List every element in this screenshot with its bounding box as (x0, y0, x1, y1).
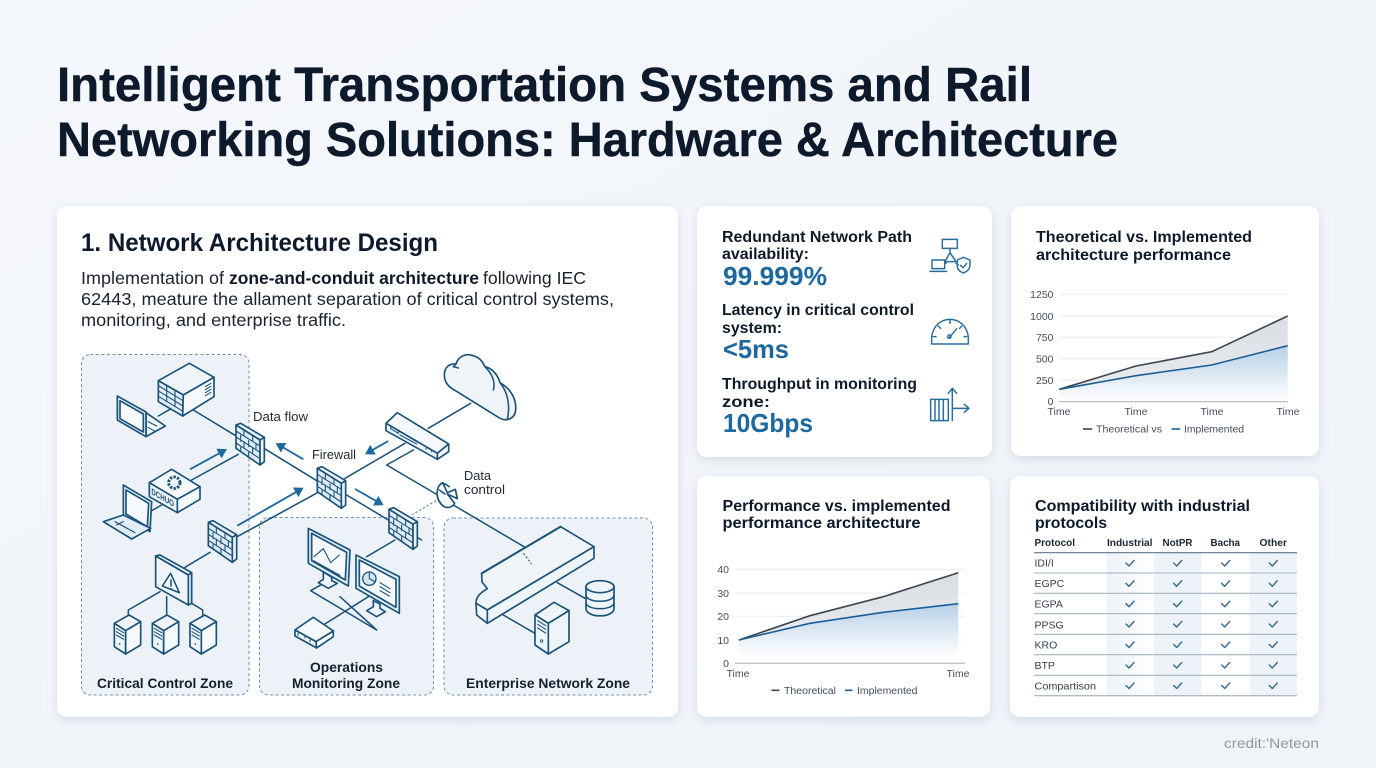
icon: enterprise server (535, 602, 569, 654)
hub label: DCHUO (151, 486, 174, 509)
network diagram: right part (340, 355, 614, 654)
area line chart: 1000 (1030, 311, 1054, 323)
label: data control: control (464, 483, 505, 497)
chart legend: Theoretical (784, 685, 836, 697)
area line chart (717, 564, 970, 680)
dashed link (412, 500, 437, 515)
label: critical control zone: Critical Control Zone (97, 675, 233, 691)
area line chart: 30 (717, 588, 729, 600)
area line chart: Time (1048, 406, 1071, 418)
intro paragraph: monitoring, and enterprise traffic. (81, 310, 346, 330)
compatibility table: Compartison (1034, 680, 1096, 692)
icon: hub (149, 469, 200, 513)
zone: enterprise network (444, 518, 652, 695)
arrow: to centre firewall (237, 489, 302, 526)
metric: throughput: 10Gbps (723, 408, 813, 438)
label: operations monitoring zone: Operations (310, 659, 383, 675)
label: data control: Data (464, 469, 491, 483)
metric: availability: 99.999% (723, 261, 827, 291)
check marks (1126, 560, 1277, 688)
metric: latency: system: (722, 320, 782, 337)
metric: availability (722, 229, 912, 291)
compatibility table: Industrial (1107, 537, 1153, 549)
table heading (1035, 498, 1250, 532)
chart legend (772, 685, 918, 697)
metric: availability: availability: (722, 246, 809, 263)
area line chart: Time (1201, 406, 1224, 418)
icon: cloud (444, 355, 516, 420)
chart heading (1036, 229, 1252, 264)
table heading: Compatibility with industrial (1035, 498, 1250, 515)
title: Networking Solutions: Hardware & Architecture (57, 114, 1118, 167)
compatibility table: KRO (1034, 640, 1057, 652)
area line chart: Time (1125, 406, 1148, 418)
network diagram: left part (103, 363, 422, 654)
area line chart: 750 (1036, 332, 1054, 344)
chart heading: Theoretical vs. Implemented (1036, 229, 1252, 246)
title (57, 59, 1118, 167)
chart legend: Implemented (857, 685, 918, 697)
table heading: protocols (1035, 515, 1107, 532)
label: operations monitoring zone (292, 659, 400, 691)
enterprise lines (503, 583, 585, 633)
metric: availability: Redundant Network Path (722, 229, 912, 246)
icon: enterprise appliance (476, 527, 594, 623)
area line chart: 250 (1036, 375, 1054, 387)
arrow: towards firewall label (367, 441, 388, 453)
icon: firewall centre (317, 467, 346, 508)
icon: firewall upper (236, 423, 264, 465)
compatibility table: PPSG (1034, 619, 1064, 631)
chart heading: Performance vs. implemented (722, 498, 950, 515)
intro paragraph: following IEC (483, 268, 586, 288)
panel: network architecture design (57, 206, 678, 717)
arrow: to upper firewall (190, 450, 225, 469)
credit: credit:'Neteon (1224, 735, 1319, 751)
metric: latency: <5ms (723, 334, 789, 364)
compatibility table: BTP (1034, 660, 1055, 672)
area line chart (1030, 289, 1300, 418)
area line chart: 20 (717, 611, 729, 623)
intro paragraph: 62443, meature the allament separation of critical control systems, (81, 289, 614, 309)
metric: latency: Latency in critical control (722, 302, 914, 319)
area line chart: 500 (1036, 354, 1054, 366)
compatibility table: Other (1260, 537, 1287, 549)
compatibility table: EGPC (1034, 578, 1065, 590)
chart legend: Implemented (1184, 424, 1244, 436)
icon: control tower 1 (114, 615, 141, 654)
label: operations monitoring zone: Monitoring Zone (292, 675, 400, 691)
icon: firewall lower (208, 521, 237, 562)
icon: laptop top (117, 396, 165, 437)
chart heading (722, 498, 950, 532)
intro paragraph: zone-and-conduit architecture (229, 268, 479, 288)
icon: gauge (932, 319, 968, 344)
icon: small gateway (295, 617, 333, 648)
icon: control tower 2 (152, 615, 179, 654)
area line chart: 0 (1048, 396, 1054, 408)
panel: protocol compatibility (1010, 476, 1319, 717)
icon: report monitor (356, 555, 399, 617)
icon: rack server (158, 363, 214, 416)
chart heading: performance architecture (722, 515, 921, 532)
connection lines (128, 408, 422, 617)
label: data flow: Data flow (253, 410, 309, 424)
icon: throughput arrows (931, 388, 969, 421)
upper connection lines (340, 403, 525, 630)
panel: theoretical vs implemented chart (1011, 206, 1319, 456)
icon: network switch (386, 413, 449, 459)
chart legend: Theoretical vs (1096, 424, 1162, 436)
arrow: towards lower firewall (355, 489, 382, 504)
label: enterprise network zone: Enterprise Network Zone (466, 675, 630, 691)
metric: throughput: zone: (722, 394, 770, 411)
compatibility table: IDI/I (1034, 558, 1054, 570)
icon: laptop bottom (103, 485, 152, 539)
area line chart: 1250 (1030, 289, 1054, 301)
icon: trend monitor (308, 528, 350, 588)
intro paragraph (81, 268, 614, 330)
icon: data control dome (437, 483, 457, 507)
area line chart: Time (947, 668, 970, 680)
compatibility table: NotPR (1162, 537, 1193, 549)
area line chart: Time (1277, 406, 1300, 418)
metric: throughput: Throughput in monitoring (722, 376, 917, 393)
chart heading: architecture performance (1036, 247, 1231, 264)
area line chart: 10 (717, 635, 729, 647)
panel: performance chart (697, 476, 990, 717)
panel: key metrics (697, 206, 992, 457)
icon: firewall operations (389, 508, 417, 549)
zone: operations monitoring (260, 518, 434, 695)
area line chart: 0 (723, 658, 729, 670)
operations lines (311, 579, 377, 630)
area line chart: Time (727, 668, 750, 680)
label: firewall: Firewall (312, 448, 356, 462)
metric: throughput (722, 376, 917, 438)
title: Intelligent Transportation Systems and Rail (57, 59, 1032, 112)
chart legend (1083, 424, 1244, 436)
metric: latency (722, 302, 914, 364)
icon: control tower 3 (190, 615, 216, 654)
compatibility table: EGPA (1034, 599, 1063, 611)
label: data control (464, 469, 505, 497)
compatibility table: Protocol (1034, 537, 1075, 549)
icon: alert panel (156, 555, 192, 605)
panel heading: 1. Network Architecture Design (81, 229, 438, 257)
icon: network with shield (930, 239, 970, 273)
area line chart: 40 (717, 564, 729, 576)
icon: database (586, 581, 614, 616)
compatibility table: Bacha (1210, 537, 1240, 549)
arrow: back to upper firewall (277, 444, 303, 459)
compatibility table (1034, 537, 1297, 696)
zone: critical control (82, 354, 249, 695)
intro paragraph: Implementation of (81, 268, 224, 288)
